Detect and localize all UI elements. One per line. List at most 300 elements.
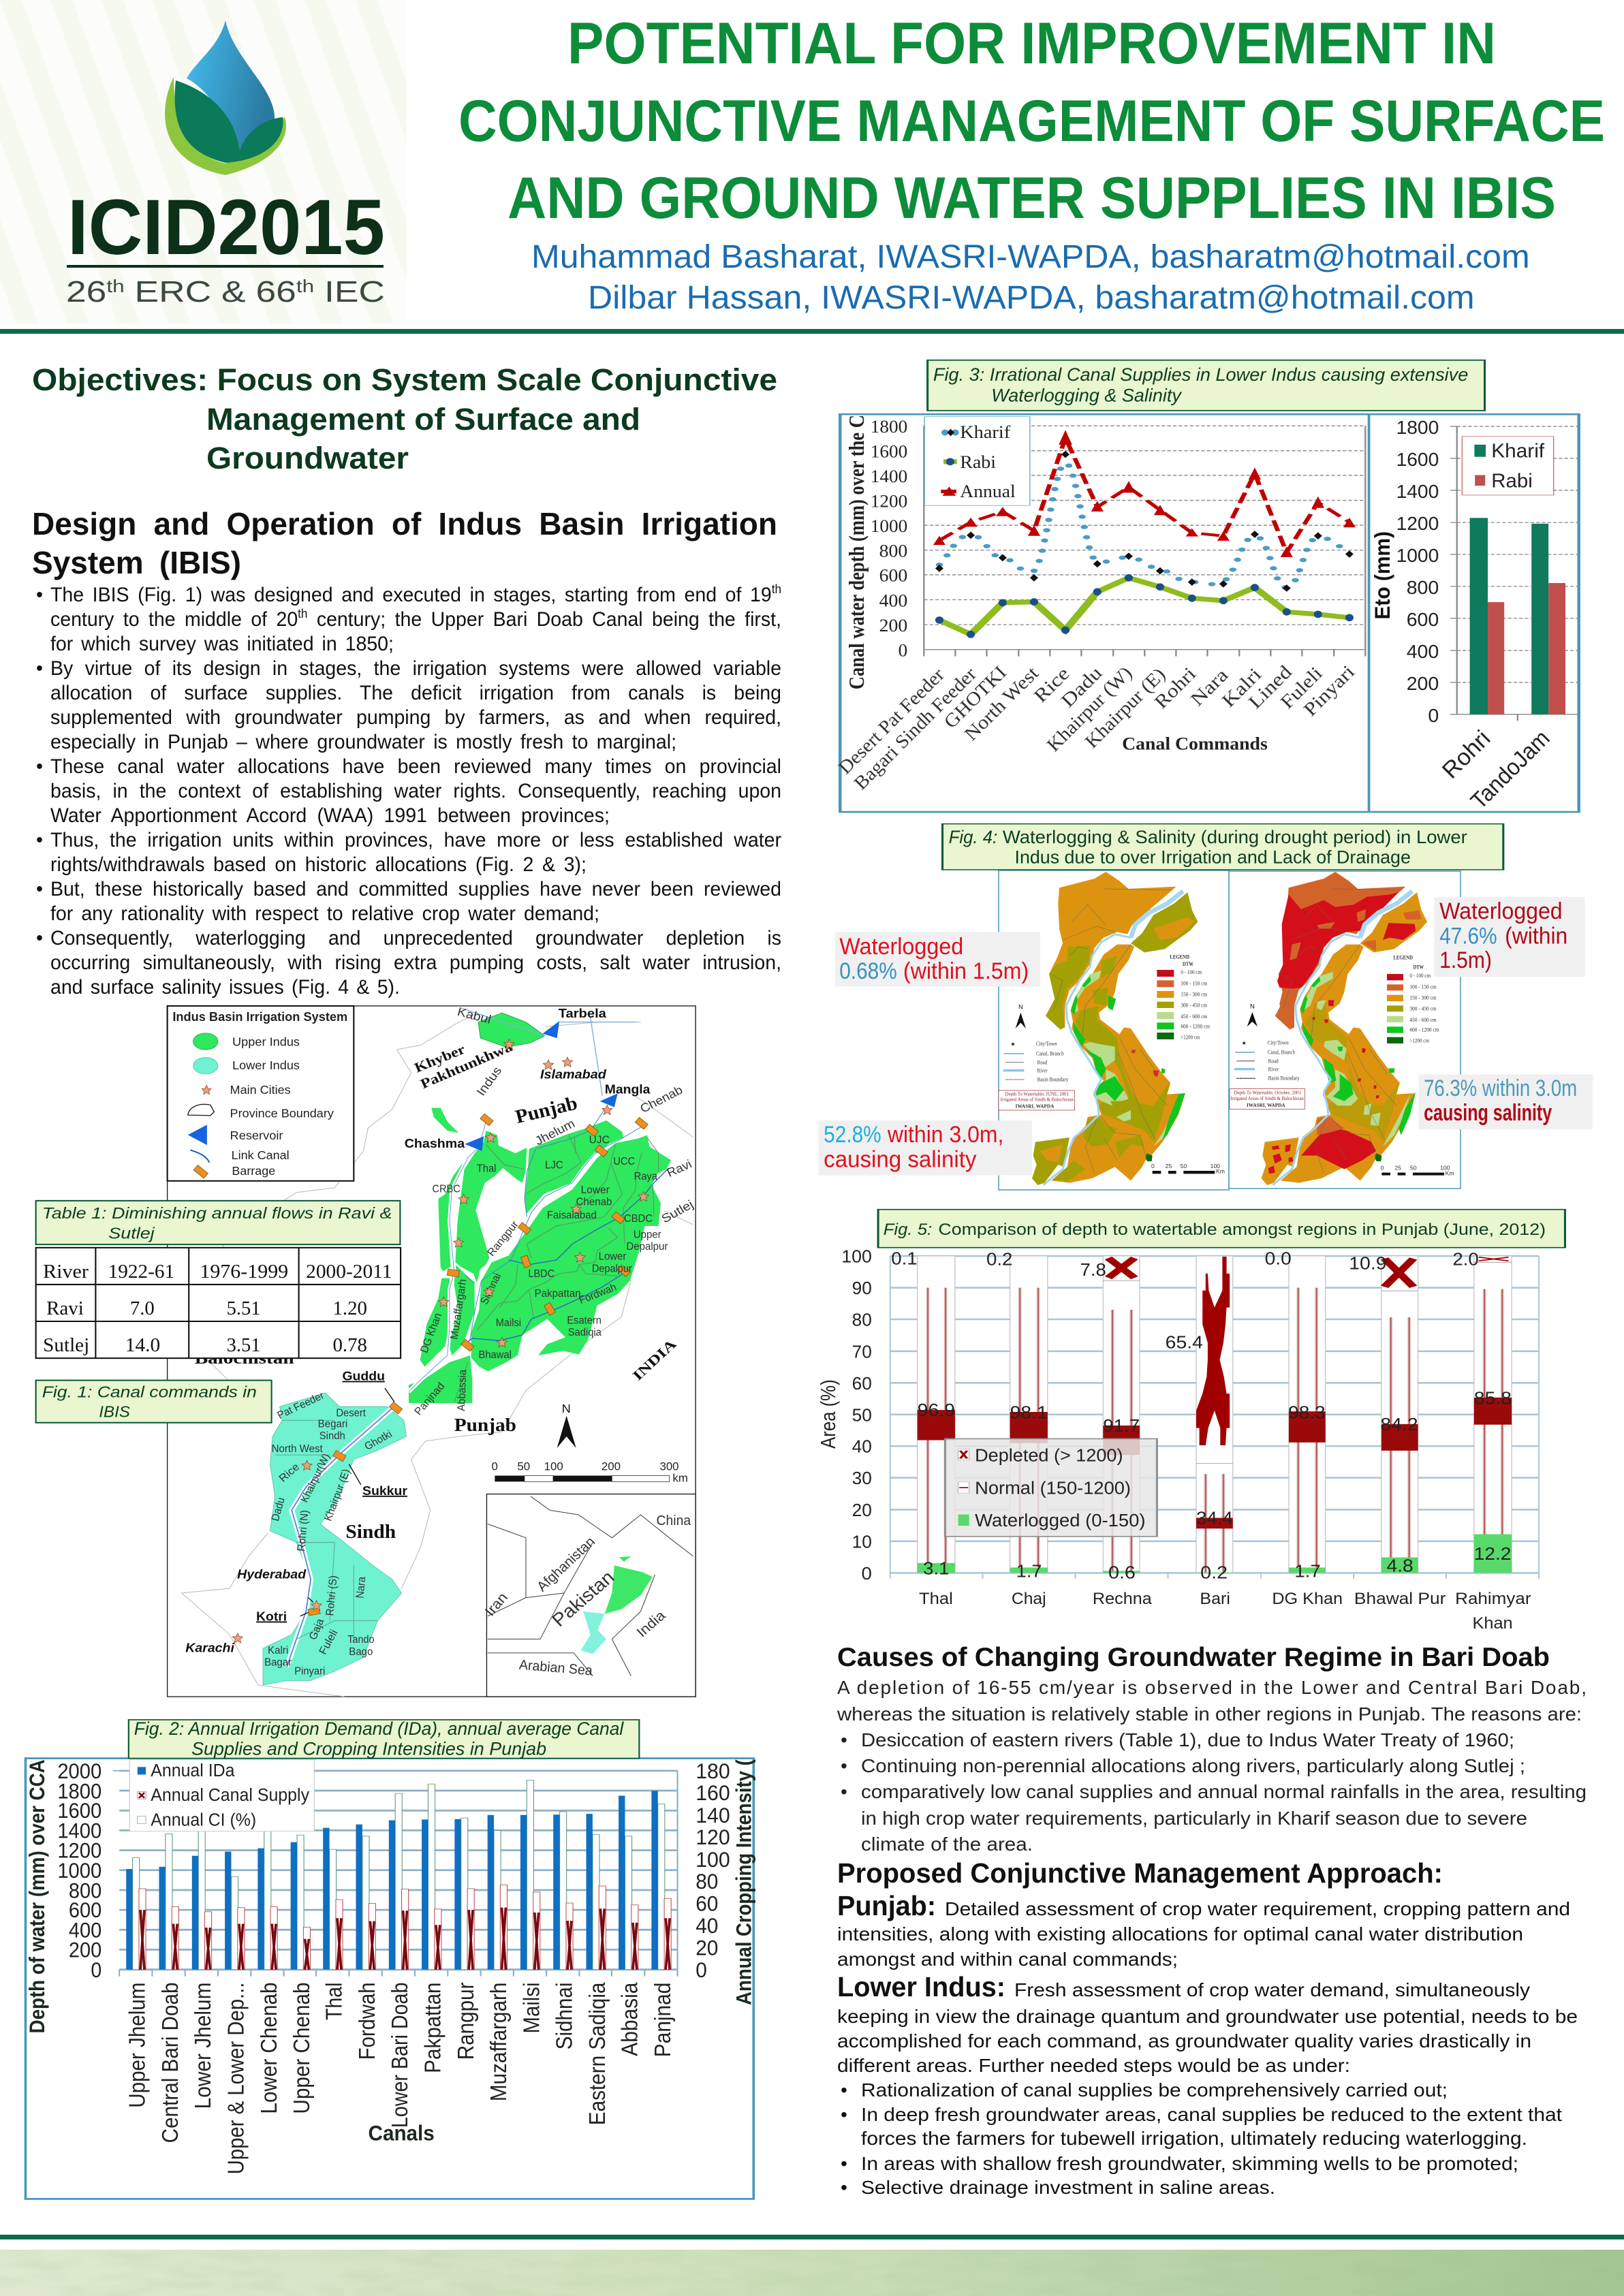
text block: IBIS design bullets: allocation of surface supplies. The deficit irrigation from canals is being — [50, 682, 781, 704]
text block: punjab: intensities, along with existing allocations for optimal canal water distribution — [837, 1923, 1523, 1945]
inset location map: Arabian Sea — [518, 1657, 593, 1678]
map labels: Kabul — [456, 1005, 493, 1026]
stacked bars: outlines — [918, 1256, 1512, 1573]
data labels: 85.8 — [1474, 1389, 1512, 1408]
eto station labels — [1437, 725, 1555, 815]
eto legend: Kharif — [1491, 440, 1545, 462]
right axis values: 40 — [696, 1913, 718, 1938]
text block: IBIS design bullets: supplemented with groundwater pumping by farmers, as and when required, — [50, 706, 781, 729]
map labels: Dadu — [270, 1496, 287, 1522]
chart legend: Normal (150-1200) — [975, 1478, 1131, 1498]
inset location map: India — [634, 1607, 669, 1640]
data labels: 12.2 — [1474, 1544, 1511, 1564]
map labels: Begari — [318, 1419, 347, 1430]
map legend: june — [999, 954, 1225, 1175]
map labels: Panjnad — [412, 1381, 447, 1417]
text block: punjab: Detailed assessment of crop water requirement, cropping pattern and — [945, 1898, 1570, 1919]
y axis values: 50 — [852, 1405, 872, 1425]
map labels: Raya — [634, 1171, 657, 1182]
map legend: june: N — [1018, 1004, 1023, 1011]
canal command labels: North West — [961, 663, 1043, 745]
text block: lower indus: Lower Indus: — [837, 1971, 1005, 2002]
eto station labels: Rohri — [1437, 725, 1495, 784]
map labels: Upper — [634, 1229, 661, 1241]
table 1: annual flows: 7.0 — [130, 1298, 155, 1319]
table 1: annual flows: 3.51 — [227, 1334, 260, 1356]
y axis values: 1200 — [871, 491, 907, 511]
map overlays and labels: Punjab — [454, 1414, 516, 1435]
map overlays and labels: INDIA — [630, 1337, 680, 1383]
map legend: Province Boundary — [230, 1107, 334, 1120]
text block: IBIS design bullets: But, these historically based and committed supplies have never been reviewed — [50, 878, 781, 900]
table 1: annual flows: 1976-1999 — [200, 1261, 288, 1283]
eto chart: 200 — [1407, 674, 1439, 695]
canal names: Sidhnai — [552, 1983, 577, 2049]
map overlays and labels: Khyber — [412, 1042, 467, 1075]
map labels: Khairpur (E) — [322, 1468, 353, 1522]
chart legend: Rabi — [960, 452, 996, 473]
map overlays and labels — [36, 1005, 696, 1697]
region labels: DG Khan — [1272, 1589, 1343, 1607]
canal names: Panjnad — [651, 1983, 676, 2057]
text block: IBIS design bullets: • — [36, 927, 43, 949]
map legend: october: 100 - 150 cm — [1409, 984, 1437, 990]
data labels: 0.2 — [1200, 1563, 1228, 1583]
map legend: october: >1200 cm — [1409, 1038, 1430, 1044]
canal command labels: Khairpur (E) — [1081, 664, 1170, 753]
figure 3 caption — [928, 360, 1484, 411]
map legend: june: 0 - 100 cm — [1181, 969, 1202, 975]
region labels: Thal — [919, 1589, 953, 1607]
map labels: Sidhnai — [478, 1272, 503, 1306]
map labels: UJC — [589, 1135, 610, 1146]
canal names: Pakpattan — [420, 1983, 446, 2073]
map legend: june: 600 - 1200 cm — [1181, 1024, 1211, 1030]
heading: proposed approach: Proposed Conjunctive Management Approach: — [837, 1857, 1443, 1889]
left axis values: 400 — [69, 1918, 102, 1942]
map legend: Lower Indus — [232, 1059, 300, 1072]
map labels: Desert — [336, 1408, 366, 1419]
map labels: Pinyari — [294, 1666, 325, 1678]
map legend: october: City/Town — [1268, 1039, 1289, 1045]
canal command labels: Nara — [1187, 664, 1233, 710]
gridlines — [924, 426, 1365, 625]
north arrow: N — [562, 1402, 571, 1415]
map labels: Pakpattan — [535, 1288, 581, 1300]
heading: objectives: Objectives: Focus on System Scale Conjunctive — [32, 362, 777, 397]
data labels: 34.4 — [1196, 1509, 1233, 1528]
map overlays and labels: Guddu — [342, 1370, 385, 1383]
text block: lower indus: different areas. Further needed steps would be as under: — [837, 2055, 1350, 2076]
chart legend: Waterlogged (0-150) — [975, 1511, 1146, 1530]
text block: IBIS design bullets: occurring simultaneously, with rising extra pumping costs, salt water intrusion, — [50, 952, 781, 974]
table 1: annual flows: 0.78 — [332, 1334, 367, 1356]
figure 5: depth to watertable stacked chart — [817, 1210, 1565, 1632]
eto chart: 1600 — [1396, 450, 1439, 471]
title — [458, 11, 1605, 231]
series: annual IDa — [126, 1791, 658, 1970]
map legend: june: ★ — [1010, 1041, 1016, 1047]
logo subtitle: th — [296, 276, 314, 296]
scale bar: 100 — [544, 1460, 563, 1473]
figure 4 caption — [943, 824, 1503, 870]
main cities — [232, 1039, 649, 1643]
map legend: june: IWASRI, WAPDA — [1016, 1103, 1055, 1110]
map legend: october: IWASRI, WAPDA — [1247, 1102, 1285, 1108]
text block: IBIS design bullets: century to the middle of 20th century; the Upper Bari Doab Canal being the first, — [50, 607, 781, 631]
data labels: 3.1 — [923, 1559, 950, 1578]
figure 3 caption: Waterlogging & Salinity — [991, 385, 1183, 405]
figure 5 caption — [878, 1210, 1565, 1248]
canal command labels: Dadu — [1057, 663, 1106, 712]
data labels: 7.8 — [1080, 1260, 1106, 1280]
text block: causes: Continuing non-perennial allocations along rivers, particularly along Sutlej ; — [861, 1755, 1525, 1776]
table 1: annual flows: River — [43, 1261, 89, 1283]
heading: objectives: Management of Surface and — [206, 402, 640, 437]
text block: IBIS design bullets: rights/withdrawals based on historic allocations (Fig. 2 & 3); — [50, 853, 587, 876]
map legend: june: LEGEND — [1170, 954, 1189, 960]
north arrow — [557, 1402, 576, 1448]
left axis values: 1200 — [57, 1838, 102, 1862]
right axis values — [696, 1759, 730, 1982]
data labels: 1.7 — [1294, 1562, 1321, 1582]
text block: IBIS design bullets: • — [36, 755, 43, 778]
leader arrows — [300, 1388, 394, 1616]
canal names: Muzaffargarh — [486, 1983, 512, 2101]
text block: lower indus: • — [841, 2079, 847, 2101]
map frames — [999, 870, 1461, 1190]
series: rabi — [935, 574, 1354, 638]
map overlays and labels: Kotri — [256, 1610, 287, 1624]
map legend: june: Basin Boundary — [1037, 1076, 1068, 1082]
map legend: june: 300 - 450 cm — [1181, 1002, 1208, 1008]
left axis values: 1800 — [57, 1779, 102, 1803]
canal command labels: Rohri — [1151, 663, 1200, 713]
depleted series markers — [1108, 1257, 1508, 1445]
map legend: june: Canal, Branch — [1036, 1050, 1064, 1056]
data labels: 91.7 — [1103, 1416, 1140, 1436]
data labels: 10.9 — [1349, 1254, 1387, 1274]
text block: causes: • — [841, 1781, 847, 1802]
text block: IBIS design bullets: and surface salinity issues (Fig. 4 & 5). — [50, 976, 400, 998]
data labels — [891, 1249, 1512, 1583]
map legend: june: 100 — [1211, 1163, 1220, 1169]
scale bar: 0 — [491, 1460, 498, 1473]
map labels: Kalri — [268, 1645, 288, 1656]
chart legend — [945, 1438, 1157, 1537]
data labels: 65.4 — [1166, 1333, 1203, 1353]
map legend: june: >1200 cm — [1181, 1035, 1200, 1041]
text block: causes: in high crop water requirements, particularly in Kharif season due to severe — [861, 1808, 1527, 1829]
map overlays and labels: Sukkur — [362, 1484, 407, 1498]
map labels: Abbassia — [456, 1369, 469, 1411]
data labels: 98.1 — [1010, 1403, 1048, 1423]
table 1 caption: Table 1: Diminishing annual flows in Ravi & — [42, 1205, 392, 1222]
inset location map: Afghanistan — [534, 1534, 598, 1594]
text block: IBIS design bullets: Consequently, waterlogging and unprecedented groundwater depletion is — [50, 927, 781, 949]
map legend: Main Cities — [230, 1083, 291, 1097]
scale bar: 300 — [659, 1460, 679, 1473]
data labels: 0.0 — [1265, 1249, 1292, 1269]
map labels: Rice — [277, 1461, 302, 1485]
canal command labels: Kalri — [1218, 664, 1266, 712]
figure 2: irrigation demand chart — [25, 1718, 755, 2199]
data labels: 2.0 — [1452, 1250, 1479, 1269]
figure 3: irrational canal supplies charts: Canal Commands — [1122, 734, 1268, 754]
map overlays and labels: Chashma — [405, 1137, 465, 1151]
text block: lower indus: • — [841, 2177, 847, 2198]
map legend: june: 450 - 600 cm — [1181, 1013, 1208, 1020]
map labels: Mailsi — [496, 1317, 521, 1329]
eto chart: 800 — [1407, 578, 1439, 599]
text block: IBIS design bullets: Thus, the irrigation units within provinces, have more or less established water — [50, 829, 781, 851]
canal command labels: Bagari Sindh Feeder — [850, 663, 981, 794]
left axis values: 200 — [69, 1938, 102, 1962]
callout: waterlogged 47.6%: 1.5m) — [1439, 947, 1492, 973]
heading: objectives — [32, 362, 777, 475]
canal names: Central Bari Doab — [158, 1983, 183, 2143]
map legend: october: 100 — [1440, 1164, 1450, 1171]
eto chart: 0 — [1428, 705, 1439, 726]
y axis values: 40 — [852, 1437, 872, 1457]
eto chart: 1400 — [1396, 482, 1439, 502]
map legend: october — [1230, 955, 1454, 1176]
map labels: Bagar — [264, 1657, 292, 1669]
text block: lower indus: Selective drainage investment in saline areas. — [861, 2177, 1275, 2198]
y axis values: 1800 — [871, 417, 907, 437]
right axis values: 60 — [696, 1891, 718, 1916]
map legend: october: 300 - 450 cm — [1409, 1005, 1437, 1011]
figure 1: canal commands map — [36, 1005, 696, 1697]
authors: Dilbar Hassan, IWASRI-WAPDA, basharatm@hotmail.com — [588, 280, 1475, 316]
eto chart: Eto (mm) — [1370, 531, 1394, 620]
map labels: Esatern — [567, 1315, 602, 1326]
y axis values: 0 — [899, 641, 907, 660]
callout: 52.8% within 3.0m: 52.8% — [824, 1121, 881, 1147]
y axis values: 0 — [861, 1564, 872, 1584]
canal command labels: Fuleli — [1277, 663, 1327, 713]
text block: lower indus: accomplished for each command, as groundwater quality varies drastically in — [837, 2030, 1531, 2051]
map overlays and labels: Sindh — [345, 1521, 396, 1543]
canal names: Rangpur — [454, 1982, 479, 2060]
map legend: june: Depth To Watertable, JUNE, 2001 — [1005, 1090, 1069, 1097]
eto chart: 1000 — [1396, 546, 1439, 567]
canal names: Upper Chenab — [290, 1983, 315, 2114]
chart legend: Annual IDa — [151, 1761, 235, 1780]
figure 2 caption — [129, 1718, 639, 1759]
map labels: Ravi — [665, 1157, 694, 1180]
map legend: october: N — [1250, 1003, 1255, 1010]
map legend: Indus Basin Irrigation System — [172, 1010, 347, 1024]
text block: IBIS design bullets: • — [36, 878, 43, 900]
eto chart: 1200 — [1396, 513, 1439, 534]
canal names: Thal — [322, 1983, 347, 2020]
map overlays and labels: Balochistan — [195, 1351, 294, 1368]
left axis values: 800 — [69, 1878, 102, 1902]
left axis values: 1600 — [57, 1799, 102, 1823]
right axis values: 160 — [696, 1781, 730, 1805]
y axis values: 90 — [852, 1278, 872, 1298]
series: annual — [933, 430, 1356, 557]
chart legend: Kharif — [960, 422, 1011, 443]
chart frame — [25, 1759, 753, 2199]
y axis values — [841, 1247, 872, 1584]
callout: waterlogged 0.68%: 0.68% — [839, 958, 897, 984]
text block: causes: • — [841, 1755, 847, 1776]
canal names: Lower Jhelum — [191, 1983, 216, 2109]
logo panel — [0, 0, 407, 324]
heading: objectives: Groundwater — [206, 441, 409, 475]
canal command labels: Pinyari — [1300, 661, 1359, 721]
map labels: Rangpur — [485, 1218, 521, 1259]
y axis values: 100 — [841, 1247, 872, 1267]
map legend: june: 50 — [1181, 1163, 1187, 1169]
map legend: october: Irrigated Areas of Sindh & Balochistan — [1231, 1095, 1304, 1101]
map labels: CRBC — [432, 1184, 460, 1195]
map labels: Sutlej — [659, 1197, 696, 1225]
table 1: annual flows: 2000-2011 — [306, 1261, 392, 1283]
region labels: Bhawal Pur — [1354, 1589, 1446, 1607]
heading: design and operation — [32, 506, 777, 580]
inset location map — [482, 1494, 696, 1697]
data labels: 84.2 — [1380, 1415, 1418, 1434]
canal command labels: Khairpur (W) — [1043, 663, 1136, 756]
left axis values: 600 — [69, 1898, 102, 1922]
heading: design and operation: Design and Operation of Indus Basin Irrigation — [32, 506, 777, 541]
callout: waterlogged 47.6%: 47.6% — [1439, 923, 1497, 949]
text block: lower indus: In deep fresh groundwater areas, canal supplies be reduced to the extent that — [861, 2104, 1562, 2125]
map legend: october: 25 — [1394, 1164, 1401, 1171]
map labels: Chenab — [576, 1197, 612, 1208]
text block: causes: comparatively low canal supplies and annual normal rainfalls in the area, resulting — [861, 1781, 1587, 1802]
data labels: 0.2 — [986, 1250, 1012, 1269]
canal boundaries — [454, 1135, 659, 1403]
map labels: Ghotki — [362, 1428, 394, 1453]
logo subtitle: ERC & 66 — [125, 275, 296, 309]
left axis values — [57, 1759, 102, 1982]
left axis values: 1000 — [57, 1858, 102, 1883]
map legend: june: 0 — [1151, 1163, 1155, 1169]
map: june 2001 — [1032, 872, 1198, 1185]
figure 5 caption: Fig. 5: — [884, 1221, 932, 1238]
map legend: october: 0 — [1381, 1164, 1384, 1171]
normal series markers — [928, 1288, 1502, 1573]
text block: IBIS design bullets: These canal water allocations have been reviewed many times on provincial — [50, 755, 781, 778]
text block: IBIS design bullets: for which survey was initiated in 1850; — [50, 633, 394, 655]
map overlays and labels: Punjab — [513, 1092, 580, 1128]
chart legend: Annual Canal Supply — [151, 1786, 309, 1805]
text block: causes — [837, 1677, 1587, 1855]
eto chart: 400 — [1407, 641, 1439, 662]
inset location map: Iran — [482, 1590, 511, 1619]
chart frame — [840, 414, 1579, 812]
map overlays and labels: Tarbela — [559, 1007, 606, 1021]
table 1: annual flows: Sutlej — [43, 1334, 89, 1356]
map legend: june: River — [1037, 1067, 1048, 1073]
axis titles: Annual Cropping Intensity ( — [732, 1759, 755, 2005]
map labels: Sindh — [319, 1430, 345, 1442]
map legend: october: 600 - 1200 cm — [1409, 1027, 1439, 1033]
figure 2 caption: Fig. 2: Annual Irrigation Demand (IDa), annual average Canal — [134, 1718, 624, 1739]
y axis values: 800 — [879, 541, 907, 561]
text block: causes: climate of the area. — [861, 1834, 1033, 1855]
figure 1 caption: IBIS — [99, 1403, 130, 1421]
map labels: Depalpur — [592, 1263, 632, 1275]
text block: IBIS design bullets: • — [36, 829, 43, 851]
y axis values: 400 — [879, 591, 907, 610]
axis titles — [25, 1759, 755, 2145]
chart legend: Annual — [960, 482, 1016, 502]
y axis title: Area (%) — [817, 1379, 841, 1449]
canal names: Upper & Lower Dep... — [223, 1983, 249, 2174]
eto legend: Rabi — [1491, 470, 1533, 492]
map labels: Bhawal — [479, 1349, 512, 1361]
text block: IBIS design bullets: Water Apportionment Accord (WAA) 1991 between provinces; — [50, 804, 610, 827]
map legend: october: Basin Boundary — [1268, 1075, 1300, 1081]
map labels: Depalpur — [626, 1241, 668, 1253]
scale bar: km — [672, 1472, 688, 1484]
chart legend — [129, 1759, 314, 1831]
figure 1 caption — [36, 1381, 272, 1423]
canal names: Fordwah — [355, 1983, 380, 2060]
right axis values: 180 — [696, 1759, 730, 1783]
y axis values: 200 — [879, 616, 907, 635]
figure 4 caption: Fig. 4: — [949, 828, 997, 847]
left axis values: 1400 — [57, 1819, 102, 1843]
title: POTENTIAL FOR IMPROVEMENT IN — [567, 11, 1496, 76]
map labels: Rohri (S) — [324, 1575, 340, 1616]
map labels: Muzaffargarh — [449, 1278, 469, 1340]
text block: causes: Desiccation of eastern rivers (Table 1), due to Indus Water Treaty of 1960; — [861, 1729, 1514, 1750]
figure 4: waterlogging and salinity maps — [819, 824, 1593, 1190]
map labels: Fuleli — [317, 1628, 341, 1656]
map legend: Barrage — [232, 1164, 275, 1178]
text block: IBIS design bullets: especially in Punjab – where groundwater is mostly fresh to marginal; — [50, 731, 676, 753]
y axis values: 80 — [852, 1310, 872, 1330]
chart legend: Annual CI (%) — [151, 1810, 256, 1829]
text block: lower indus: In areas with shallow fresh groundwater, skimming wells to be promoted; — [861, 2153, 1518, 2174]
canal names: Mailsi — [519, 1983, 544, 2033]
right axis values: 20 — [696, 1936, 718, 1960]
y axis values: 30 — [852, 1468, 872, 1488]
map legend: june: City/Town — [1036, 1041, 1057, 1047]
table 1: annual flows: 5.51 — [227, 1298, 260, 1319]
callout: waterlogged 47.6% — [1434, 897, 1585, 977]
authors: Muhammad Basharat, IWASRI-WAPDA, basharatm@hotmail.com — [531, 239, 1530, 275]
table 1: annual flows: 1922-61 — [108, 1261, 174, 1283]
eto chart: 1800 — [1396, 418, 1439, 439]
map labels: Gaja — [307, 1617, 326, 1641]
map legend: october: ★ — [1242, 1040, 1247, 1046]
map labels: Chenab — [638, 1083, 685, 1116]
right axis values: 120 — [696, 1825, 730, 1849]
map labels: Bago — [349, 1646, 373, 1658]
gridlines — [890, 1256, 1539, 1573]
map legend: october: Km — [1446, 1169, 1454, 1176]
map overlays and labels: Islamabad — [540, 1068, 607, 1082]
inset location map: China — [657, 1513, 691, 1528]
y axis values: 1600 — [871, 442, 907, 461]
heading: design and operation: System (IBIS) — [32, 545, 241, 580]
map labels: LJC — [545, 1160, 563, 1171]
table 1: annual flows: 14.0 — [125, 1334, 160, 1356]
map labels: Fordwah — [578, 1282, 619, 1306]
left axis values: 0 — [91, 1957, 102, 1982]
right axis values: 140 — [696, 1803, 730, 1827]
eto chart: 600 — [1407, 609, 1439, 630]
axis titles: Canal water depth (mm) over the C — [845, 415, 869, 689]
map labels: DG Khan — [418, 1312, 444, 1355]
